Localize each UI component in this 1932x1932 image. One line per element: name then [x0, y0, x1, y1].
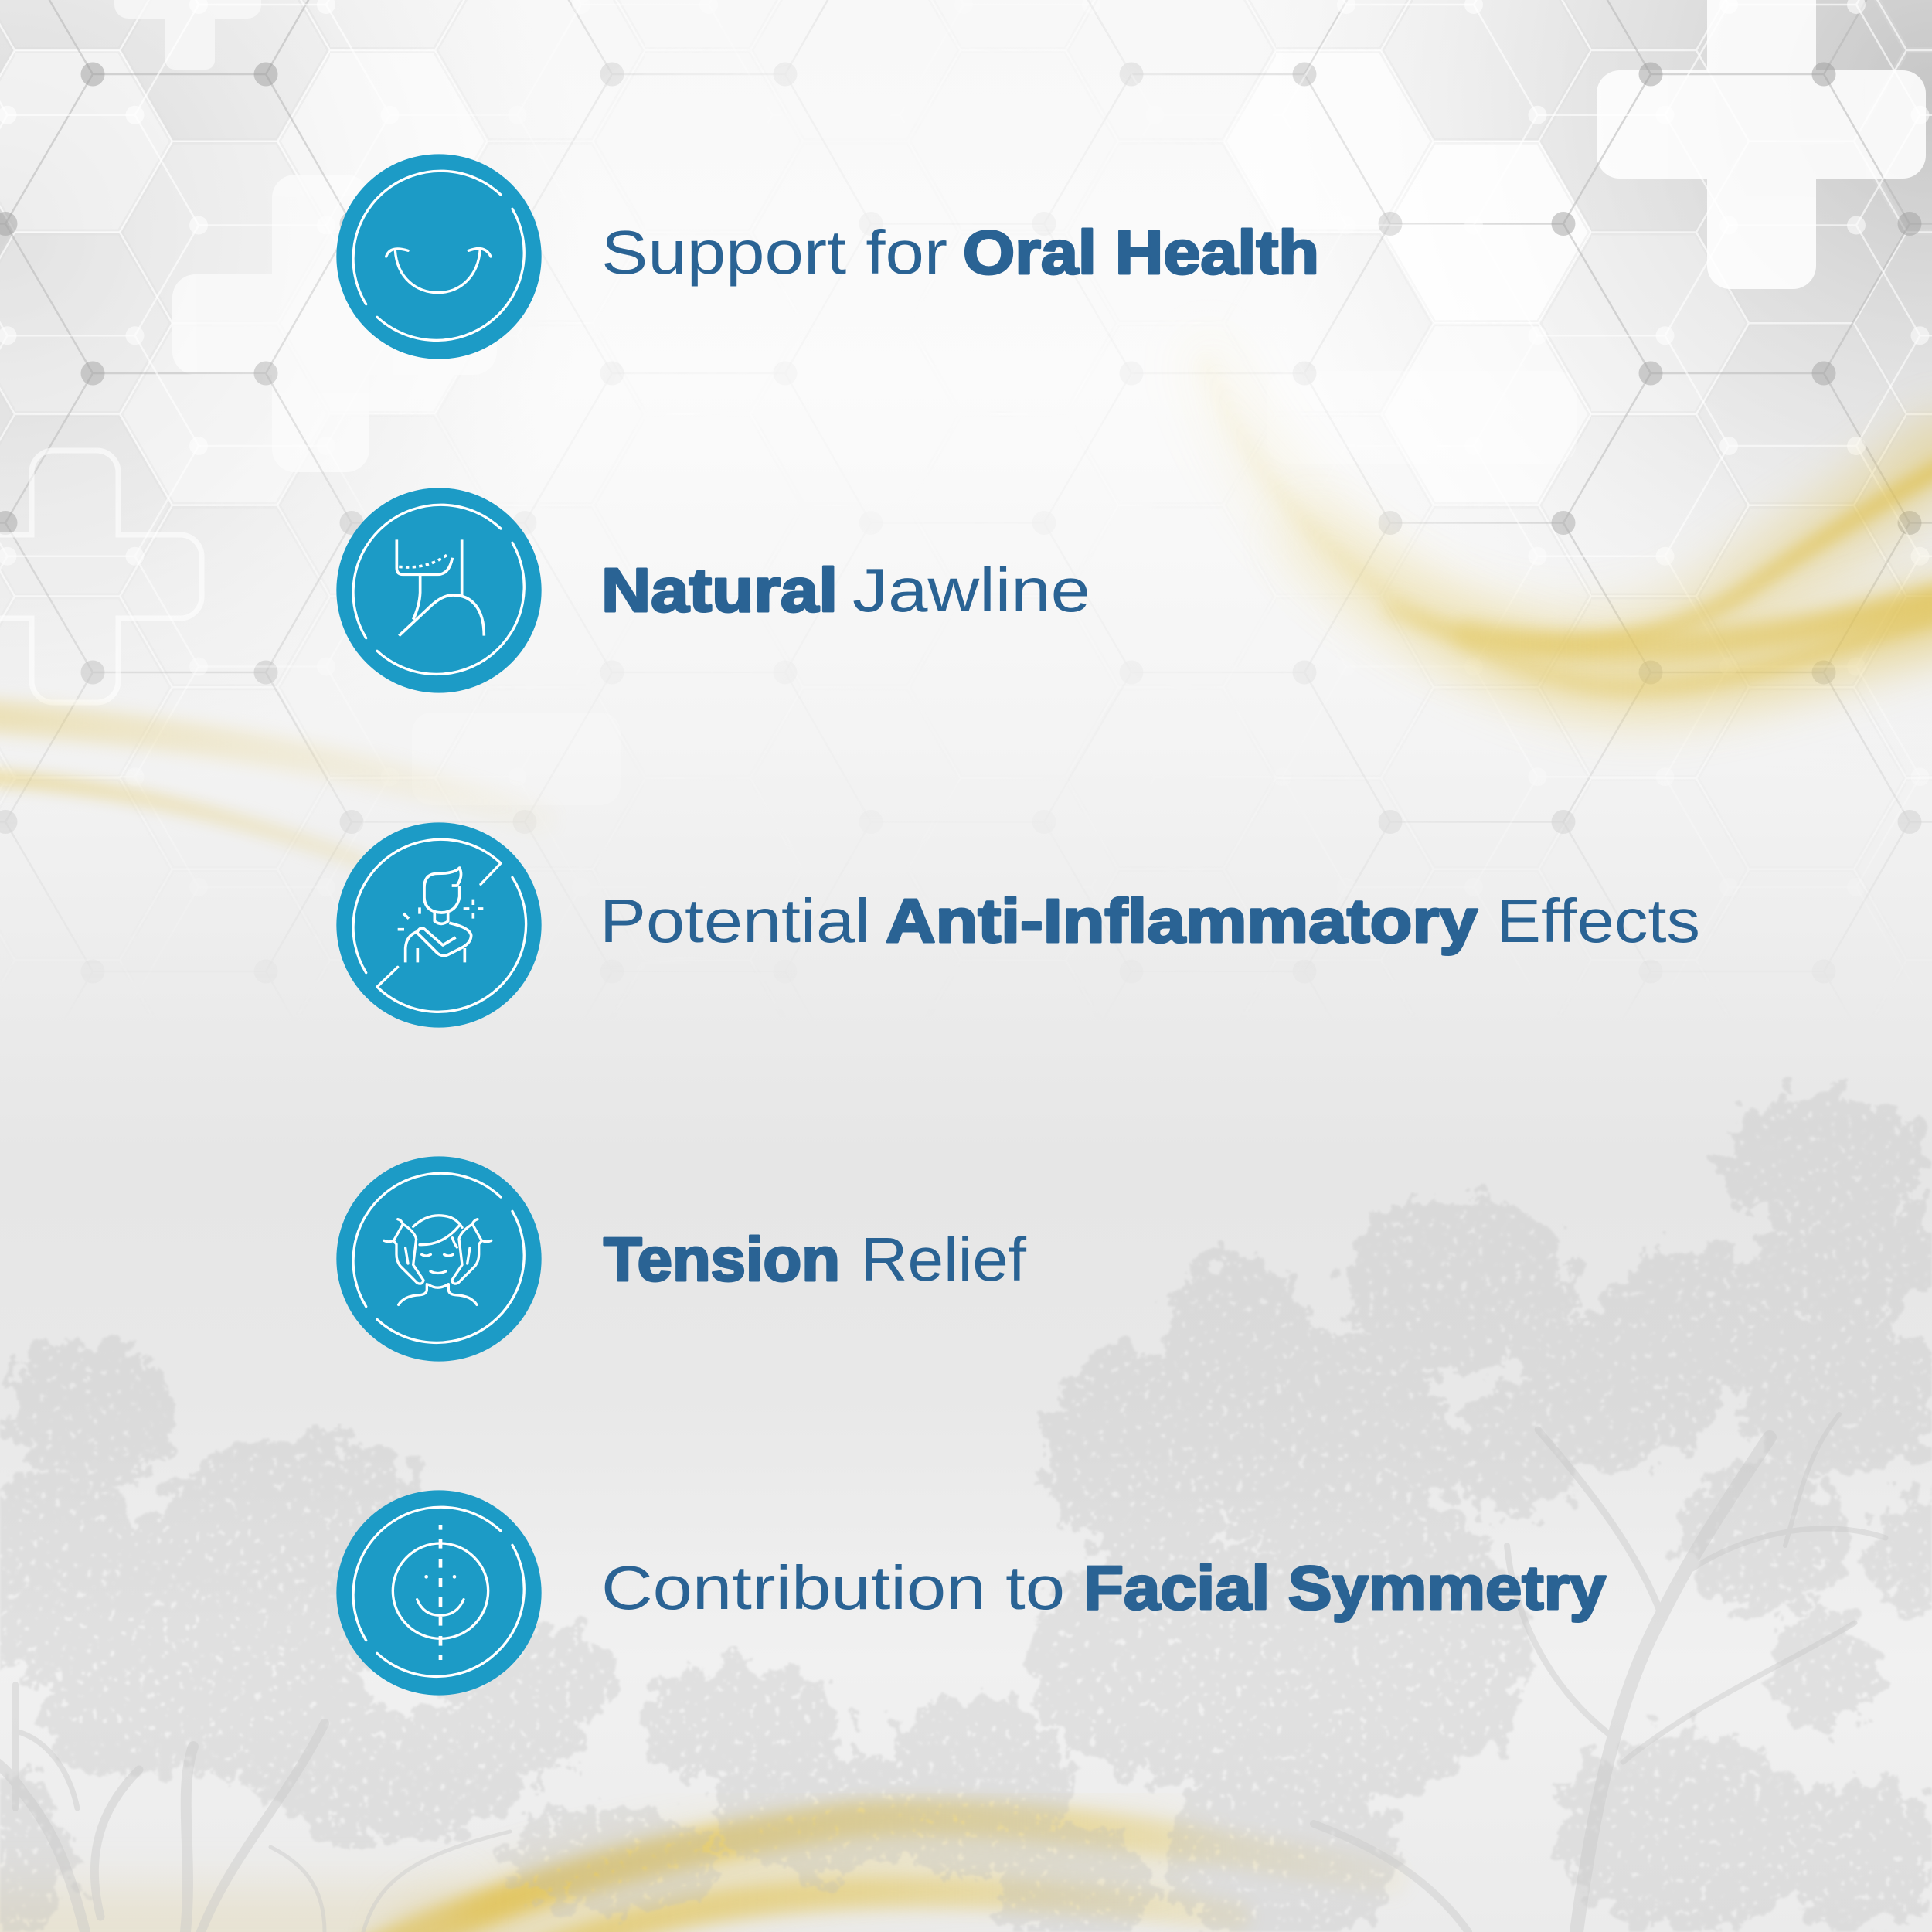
text: potential anti-inflammatory effects	[600, 886, 1700, 955]
white hexagon fills	[0, 50, 1749, 505]
tree silhouettes: foliage	[0, 1090, 1932, 1932]
dark hexagon node grid	[0, 0, 1932, 895]
text: potential anti-inflammatory effects: Effects	[1496, 886, 1700, 955]
item 3: anti-inflammatory	[336, 822, 1700, 1028]
icon: jawline	[336, 488, 542, 693]
text: contribution to facial symmetry	[601, 1553, 1607, 1622]
white hexagon node grid	[0, 0, 1932, 777]
text: natural jawline: Natural	[601, 556, 838, 624]
text: tension relief: Relief	[861, 1225, 1027, 1294]
text: potential anti-inflammatory effects: Potential	[600, 886, 870, 955]
filled white cross: top edge	[114, 0, 261, 70]
mid hexagon outline grid	[0, 0, 1932, 615]
warm haze: bottom left	[0, 1886, 464, 1932]
icon: smile	[336, 154, 542, 359]
text: tension relief: Tension	[604, 1225, 840, 1294]
text: support for oral health: Oral Health	[963, 218, 1319, 287]
gold swoosh: top right	[1206, 363, 1932, 688]
text: contribution to facial symmetry: Facial Symmetry	[1083, 1553, 1607, 1622]
icon: face massage	[336, 1156, 542, 1362]
filled white cross: top left	[172, 175, 497, 472]
faint white panel: right centre	[1267, 371, 1577, 464]
text: support for oral health: Support for	[601, 218, 947, 287]
text: support for oral health	[601, 218, 1319, 287]
gold swoosh: left	[0, 715, 541, 862]
item 4: tension relief	[336, 1156, 1027, 1362]
text: natural jawline	[601, 556, 1090, 624]
icon: symmetrical face	[336, 1490, 542, 1696]
text: tension relief	[604, 1225, 1027, 1294]
outlined cross: left	[0, 451, 202, 702]
item 2: natural jawline	[336, 488, 1090, 693]
gold swoosh: bottom	[371, 1818, 1391, 1932]
item 5: facial symmetry	[336, 1490, 1607, 1696]
text: natural jawline: Jawline	[852, 556, 1090, 624]
text: potential anti-inflammatory effects: Anti-Inflammatory	[886, 886, 1478, 955]
icon: person with sore shoulder	[336, 822, 542, 1028]
filled white cross: top right	[1597, 0, 1926, 289]
tree silhouettes: trunks and branches	[0, 1414, 1886, 1932]
faint white panel: mid left	[412, 713, 621, 805]
background corner shade: top right	[1082, 0, 1932, 850]
background corner shade: top left	[0, 0, 618, 850]
item 1: oral health	[336, 154, 1319, 359]
text: contribution to facial symmetry: Contribution to	[601, 1553, 1065, 1622]
